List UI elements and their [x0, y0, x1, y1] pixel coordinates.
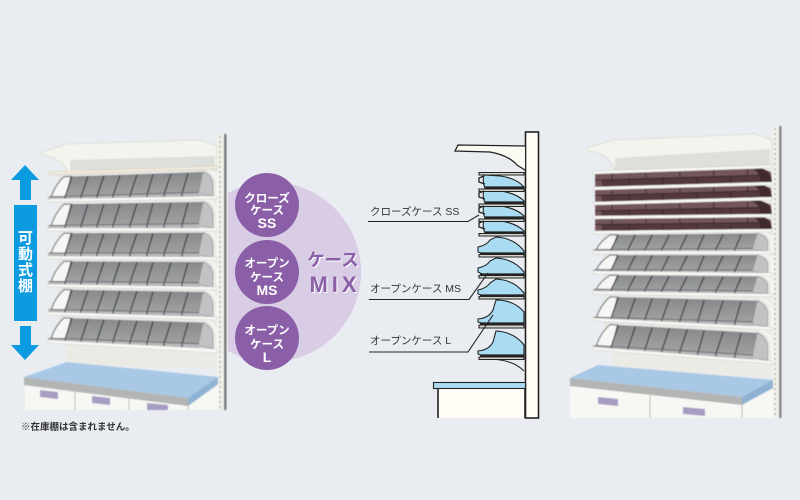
label bar: movable shelf [14, 205, 37, 321]
heading: case mix: MIX [310, 273, 362, 298]
badge: closed case SS [235, 173, 299, 237]
callout: closed case SS: クローズケース SS [370, 205, 459, 218]
callout: open case L: オープンケース L [370, 335, 451, 347]
label: 可動式棚: 棚 [18, 277, 33, 295]
panel: right shelf unit with closed and open cases [570, 126, 782, 418]
side view counter [434, 382, 526, 418]
right unit counter [570, 365, 773, 418]
label: 可動式棚: 動 [18, 246, 33, 263]
heading: case mix: ケース [308, 251, 360, 271]
large circle [228, 182, 361, 362]
left unit case rows [48, 168, 217, 350]
callout: open case L [369, 315, 493, 352]
panel: left shelf unit with open cases [24, 134, 226, 410]
label: 可動式棚 [18, 230, 33, 295]
left unit counter [24, 362, 218, 410]
badge: open case L [235, 306, 299, 370]
badge: open case MS: ケース [250, 271, 284, 284]
left unit upright post [217, 134, 226, 410]
side view top shelf [455, 145, 525, 170]
badge: open case L: オープン [244, 324, 290, 337]
badge: closed case SS: ケース [250, 204, 284, 217]
left unit shelf boards [48, 166, 217, 353]
badge: open case MS [235, 240, 299, 304]
badge: open case MS: オープン [244, 257, 290, 270]
side view open cases L [478, 296, 524, 371]
arrow: movable shelf range [11, 165, 39, 360]
badge: open case L: ケース [250, 338, 284, 351]
panel: side view diagram [368, 132, 538, 418]
note: ※在庫棚は含まれません。 [21, 421, 135, 433]
side view post [526, 132, 538, 418]
left unit top shelf [42, 140, 217, 172]
badge: closed case SS: SS [258, 215, 276, 231]
right unit top shelf [587, 134, 772, 170]
arrow up [11, 165, 39, 200]
callout: open case MS [369, 273, 488, 300]
callout: closed case SS [368, 205, 479, 222]
side view closed cases SS [479, 172, 524, 236]
left unit back panel [66, 150, 216, 368]
label: 可動式棚: 可 [18, 230, 33, 247]
callout: open case MS: オープンケース MS [370, 283, 461, 295]
right unit open case rows [593, 231, 772, 362]
badge: closed case SS: クローズ [244, 191, 290, 205]
label: 可動式棚: 式 [18, 262, 33, 279]
panel: case mix badge [228, 173, 362, 370]
right unit back panel [612, 136, 772, 378]
side view open cases MS [478, 237, 524, 296]
arrow down [11, 326, 39, 360]
right unit closed case rows [595, 167, 772, 231]
badge: open case L: L [263, 349, 272, 365]
right unit shelf boards [593, 165, 772, 364]
right unit upright post [772, 126, 782, 418]
badge: open case MS: MS [256, 282, 278, 298]
heading: case mix [307, 250, 362, 298]
heading: case mix: ケース [307, 250, 359, 270]
heading: case mix: MIX [309, 272, 361, 297]
